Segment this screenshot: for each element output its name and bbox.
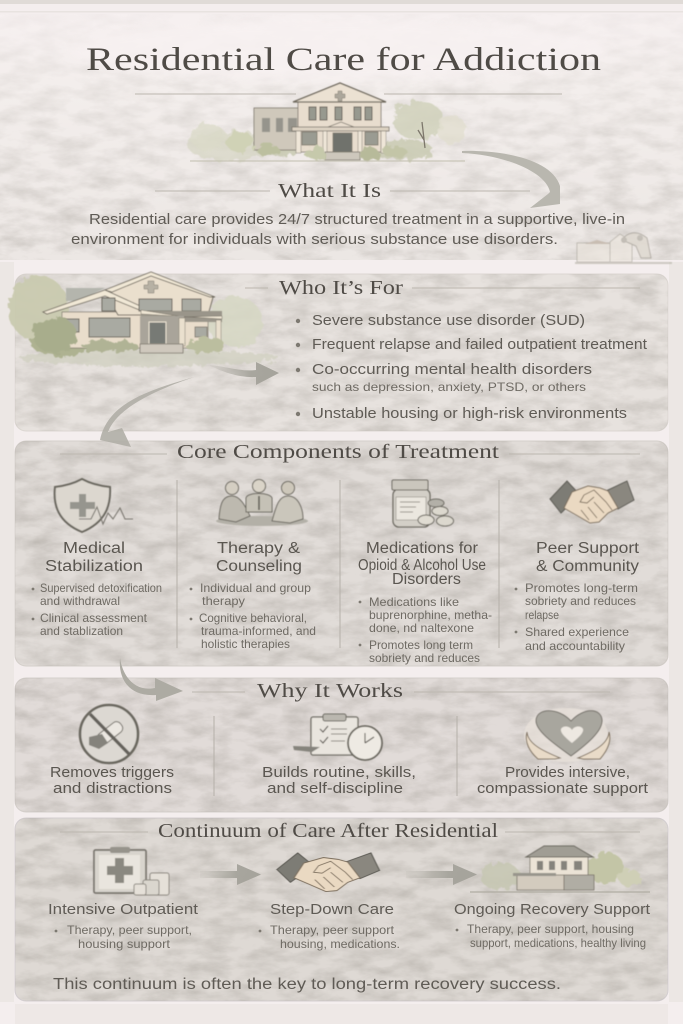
list: who it's for [296, 313, 647, 422]
label: builds routine: and self-discipline [267, 781, 403, 797]
heading: therapy and counseling: Therapy & [217, 540, 301, 557]
icon: medical clipboard [94, 847, 169, 895]
heading: medical stabilization [45, 540, 143, 575]
illustration: small farm [575, 233, 672, 263]
list: peer support: and accountability [525, 639, 625, 653]
closing statement: This continuum is often the key to long-term recovery success. [53, 976, 561, 993]
icon: pill bottle [392, 480, 454, 527]
arrow: step-down to recovery [406, 864, 477, 885]
list: medications: sobriety and reduces [369, 651, 480, 665]
heading: medications: Opioid & Alcohol Use [358, 557, 486, 574]
illustration: recovery home [470, 846, 650, 892]
list: therapy and counseling: Cognitive behavioral, [199, 611, 307, 625]
arrow: house to list [209, 362, 279, 385]
list: peer support: Shared experience [525, 625, 629, 639]
list: therapy and counseling: therapy [202, 594, 245, 608]
list: therapy and counseling [190, 581, 316, 651]
icon: group therapy [216, 480, 308, 526]
list: medications: Promotes long term [369, 638, 473, 652]
list: peer support: Promotes long-term [525, 581, 638, 595]
list: peer support: relapse [525, 608, 559, 622]
list: medical stabilization [32, 581, 162, 638]
column: medical stabilization [32, 479, 162, 638]
list: step-down care: housing, medications. [280, 937, 400, 951]
icon: shield with heartbeat [55, 479, 133, 532]
icon: no substances [80, 705, 138, 763]
list: who it's for: Unstable housing or high-risk environments [312, 406, 627, 422]
column: removes triggers [50, 705, 174, 797]
label: provides support: Provides intersive, [505, 765, 630, 781]
list: who it's for: Severe substance use disorder (SUD) [312, 313, 585, 329]
label: removes triggers: Removes triggers [50, 765, 174, 781]
heading: why it works: Why It Works [257, 680, 403, 702]
icon: clipboard and clock [293, 714, 382, 760]
step: step-down care [259, 853, 400, 951]
column: medications [358, 480, 492, 665]
text block: definition [71, 212, 625, 248]
text block: definition: Residential care provides 24/7 structured treatment in a supportive, live-in [89, 212, 625, 228]
arrow: outpatient to step-down [200, 864, 261, 885]
label: step-down care: Step-Down Care [270, 902, 394, 918]
column: provides support [477, 708, 648, 797]
column: therapy and counseling [190, 480, 316, 651]
list: ongoing recovery support [456, 922, 646, 950]
panel: continuum of care [15, 818, 668, 1001]
illustration: craftsman house [8, 272, 280, 366]
label: builds routine: Builds routine, skills, [262, 765, 416, 781]
label: removes triggers: and distractions [53, 781, 172, 797]
label: removes triggers [50, 765, 174, 797]
list: therapy and counseling: holistic therapies [201, 637, 290, 651]
heading: Who It's For: Who It’s For [279, 277, 403, 299]
list: intensive outpatient [55, 923, 192, 951]
heading: medications: Disorders [392, 571, 461, 588]
list: intensive outpatient: housing support [78, 937, 171, 951]
illustration: residential care house [135, 83, 562, 161]
arrow: house to what it is [462, 151, 560, 208]
list: who it's for: Co-occurring mental health disorders [312, 362, 592, 378]
arrow: who it's for to core components [100, 377, 194, 447]
text block: definition: environment for individuals with serious substance use disorders. [71, 232, 558, 248]
list: intensive outpatient: Therapy, peer support, [67, 923, 192, 937]
list: who it's for: Frequent relapse and failed outpatient treatment [312, 337, 647, 353]
heading: peer support: Peer Support [536, 540, 640, 557]
label: builds routine [262, 765, 416, 797]
list: medications: Medications like [369, 595, 459, 609]
panel: why it works [15, 678, 668, 812]
list: medications: done, nd naltexone [369, 621, 474, 635]
heading: peer support [536, 540, 640, 575]
list: therapy and counseling: Individual and group [200, 581, 311, 595]
heading: therapy and counseling: Counseling [216, 558, 302, 575]
icon: handshake [277, 853, 379, 892]
icon: handshake [550, 481, 634, 523]
column: peer support [515, 481, 640, 653]
label: provides support [477, 765, 648, 797]
heading: peer support: & Community [536, 558, 639, 575]
heading: medical stabilization: Stabilization [45, 558, 143, 575]
column: builds routine [262, 714, 416, 797]
step: ongoing recovery support [454, 846, 650, 950]
arrow: core to why it works [120, 658, 183, 701]
list: step-down care: Therapy, peer support [270, 923, 395, 937]
list: peer support [515, 581, 638, 653]
icon: heart in hands [524, 708, 610, 762]
step: intensive outpatient [48, 847, 198, 951]
label: ongoing recovery support: Ongoing Recovery Support [454, 902, 650, 918]
heading: core components: Core Components of Treatment [177, 441, 500, 463]
list: ongoing recovery support: support, medications, healthy living [470, 936, 646, 950]
title: Residential Care for Addiction [86, 42, 601, 78]
heading: What It Is: What It Is [278, 180, 381, 202]
label: intensive outpatient: Intensive Outpatient [48, 902, 198, 918]
list: medications: buprenorphine, metha- [369, 608, 492, 622]
list: ongoing recovery support: Therapy, peer support, housing [467, 922, 634, 936]
label: provides support: compassionate support [477, 781, 648, 797]
list: therapy and counseling: trauma-informed, and [201, 624, 316, 638]
heading: therapy and counseling [216, 540, 302, 575]
list: medical stabilization: Supervised detoxification [40, 581, 162, 595]
list: medical stabilization: and stablization [40, 624, 123, 638]
heading: medications: Medications for [366, 540, 478, 557]
list: step-down care [259, 923, 400, 951]
panel: core components of treatment [15, 441, 668, 666]
list: who it's for: such as depression, anxiety, PTSD, or others [312, 380, 586, 394]
list: peer support: sobriety and reduces [525, 594, 636, 608]
list: medical stabilization: Clinical assessment [40, 611, 148, 625]
list: medical stabilization: and withdrawal [40, 594, 120, 608]
panel: who it's for [8, 272, 668, 431]
heading: medications [358, 540, 486, 588]
heading: continuum of care: Continuum of Care After Residential [158, 820, 499, 842]
heading: medical stabilization: Medical [63, 540, 125, 557]
list: medications [359, 595, 492, 665]
